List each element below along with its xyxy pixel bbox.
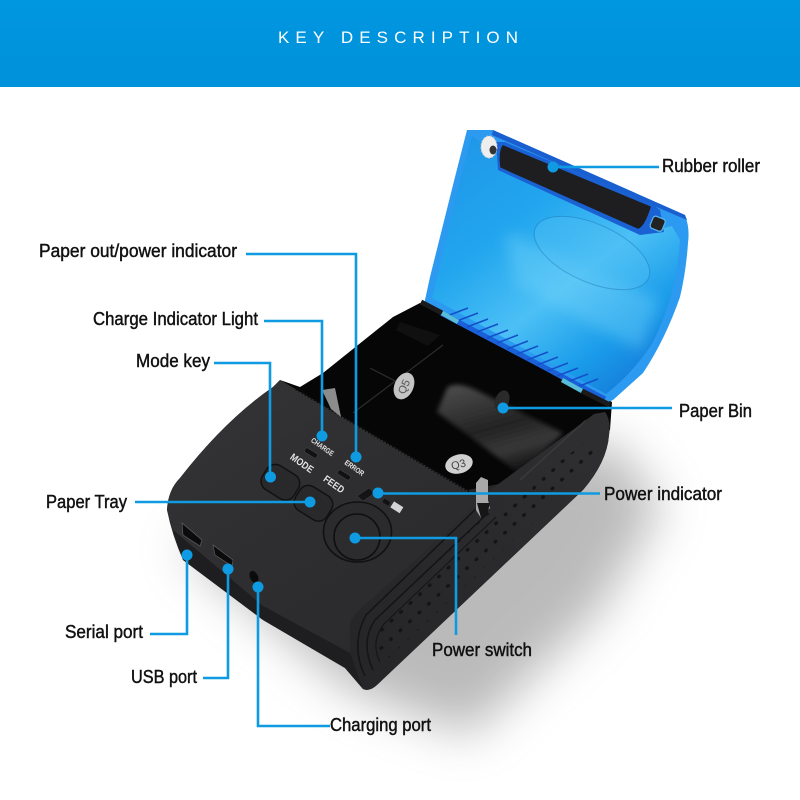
callout: power switch [350, 532, 532, 660]
hinge teeth [447, 308, 598, 387]
callout: usb port: USB port [131, 667, 197, 687]
hinge strip [441, 313, 605, 399]
callout: usb port [131, 564, 234, 687]
roller gear [481, 136, 497, 158]
callout: paper bin [498, 401, 752, 421]
feed key [290, 482, 337, 525]
callout: rubber roller: Rubber roller [662, 156, 760, 176]
callout: serial port: Serial port [65, 622, 143, 642]
callout: serial port [65, 550, 192, 642]
printer illustration [167, 130, 689, 690]
callout: paper out indicator [39, 241, 362, 462]
spool marker Q3: Q3 [450, 457, 467, 473]
right dotted side panel [350, 412, 610, 690]
open blue lid [421, 130, 689, 405]
battery icon [390, 501, 403, 513]
rubber roller [481, 136, 666, 235]
paper compartment interior [280, 303, 612, 510]
spool marker Q5: Q5 [396, 378, 413, 396]
callout: paper out indicator: Paper out/power indicator [39, 241, 237, 261]
power button [324, 502, 392, 562]
callout: charging port [252, 582, 431, 735]
printer shadow [178, 440, 662, 735]
callout: charge indicator [93, 309, 328, 442]
callout: mode key: Mode key [136, 351, 210, 371]
ports [182, 523, 260, 585]
control panel: ERROR [343, 458, 366, 478]
front and top body [167, 380, 490, 689]
callout: rubber roller [548, 156, 760, 176]
panel labels: CHARGE [309, 436, 336, 458]
indicator slots [304, 447, 318, 459]
spool marker Q3 [443, 451, 475, 477]
callout: power switch: Power switch [432, 640, 532, 660]
header banner [0, 0, 800, 87]
control panel [257, 436, 403, 562]
callout: charge indicator: Charge Indicator Light [93, 309, 258, 329]
callout: power indicator [372, 484, 722, 504]
spool marker Q5 [390, 369, 418, 403]
control panel: FEED [321, 474, 346, 496]
callout: paper bin: Paper Bin [679, 401, 752, 421]
callout: paper tray [46, 492, 316, 512]
title: KEY DESCRIPTION [278, 28, 518, 47]
serrated edge [296, 389, 470, 492]
printer body base [167, 380, 610, 690]
lid window ellipse [524, 201, 660, 305]
mode key [257, 461, 304, 504]
hinge ends [421, 302, 442, 313]
callout: mode key [136, 351, 276, 482]
metal clips [322, 388, 341, 417]
callout: charging port: Charging port [330, 715, 431, 735]
callout: paper tray: Paper Tray [46, 492, 127, 512]
callout: power indicator: Power indicator [604, 484, 722, 504]
roller end knob [649, 215, 666, 232]
paper holder stud [492, 388, 512, 414]
control panel: MODE [288, 452, 315, 476]
